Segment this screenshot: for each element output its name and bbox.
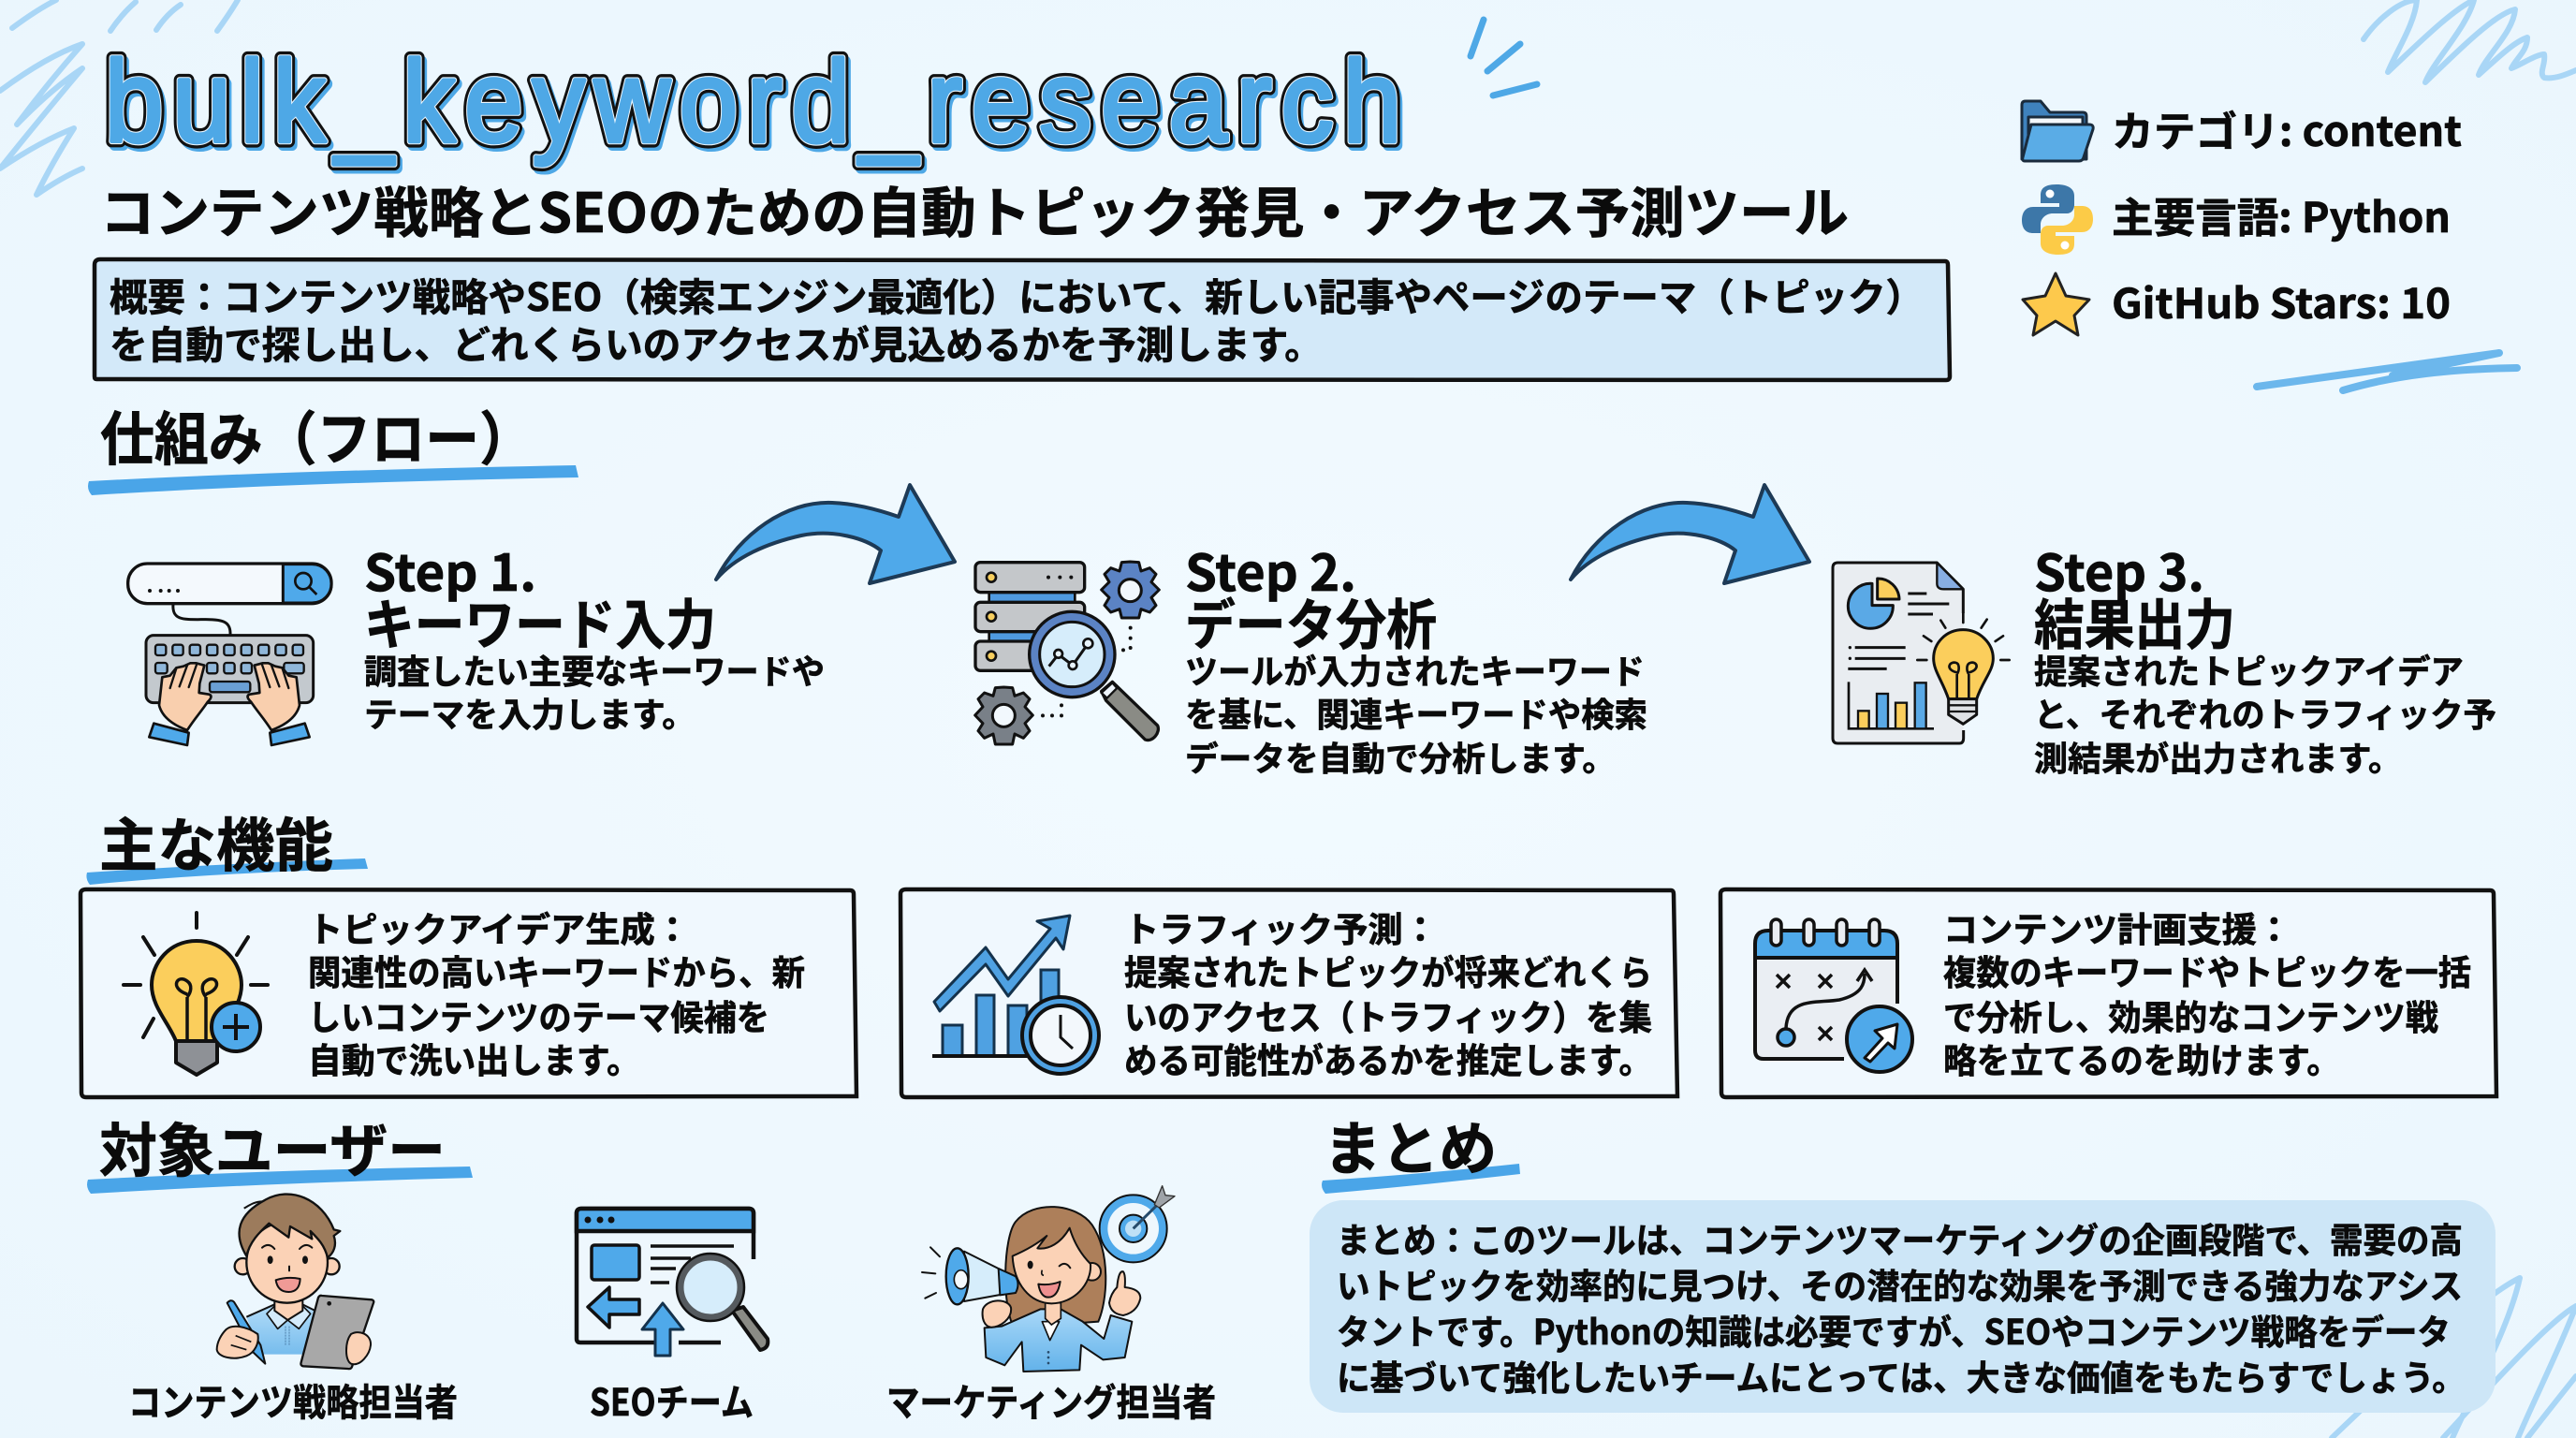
summary text: まとめ：このツールは、コンテンツマーケティングの企画段階で、需要の高 [1337,1212,2463,1263]
feature text: 自動で洗い出します。 [308,1033,640,1083]
user label: コンテンツ戦略担当者 [128,1372,458,1427]
step 1 [128,532,825,745]
feature text: 略を立てるのを助けます。 [1943,1033,2340,1083]
step 1 description: 調査したい主要なキーワードや [364,645,825,694]
step 2 description: データを自動で分析します。 [1185,732,1616,781]
panel: feature topic ideas [80,889,856,1097]
feature text: トラフィック予測： [1124,902,1438,952]
step 2: データ分析 [1185,581,1437,660]
heading: summary: まとめ [1324,1102,1497,1186]
feature text: コンテンツ計画支援： [1943,902,2291,952]
sparkle accent marks [1471,20,1537,95]
meta info list [2022,98,2462,335]
icon: chart and clock [932,916,1099,1074]
summary text: いトピックを効率的に見つけ、その潜在的な効果を予測できる強力なアシス [1337,1258,2463,1309]
decorative scribble top left [0,0,238,195]
icon: python [2022,184,2093,255]
panel: feature content planning [1720,889,2496,1097]
stars label: GitHub Stars: 10 [2112,271,2451,330]
step 2 [975,532,1647,781]
summary text [1337,1212,2466,1401]
panel: summary [1310,1200,2496,1413]
step 1: キーワード入力 [364,581,716,660]
title: bulk_keyword_research [105,37,1401,166]
step 3: 結果出力 [2034,581,2235,660]
user: content strategist [128,1195,458,1427]
step 2 description [1185,645,1647,781]
step 1 description [364,645,825,737]
icon: star [2023,273,2089,335]
panel: overview [95,259,1950,380]
step 3 description: 測結果が出力されます。 [2034,732,2402,781]
user: marketing manager [886,1186,1216,1427]
summary text: タントです。Pythonの知識は必要ですが、SEOやコンテンツ戦略をデータ [1337,1304,2451,1355]
icon: report and light bulb [1833,563,2010,743]
brush accent under meta [2257,353,2517,390]
feature text: で分析し、効果的なコンテンツ戦 [1943,990,2438,1040]
step 3 heading: Step 3. [2034,532,2204,606]
feature text: しいコンテンツのテーマ候補を [308,990,769,1040]
summary text: に基づいて強化したいチームにとっては、大きな価値をもたらすでしょう。 [1337,1350,2466,1401]
subtitle: コンテンツ戦略とSEOのための自動トピック発見・アクセス予測ツール [100,169,1849,248]
icon: man with tablet [217,1195,373,1369]
category label: カテゴリ: content [2112,98,2462,158]
feature text: 関連性の高いキーワードから、新 [308,945,805,995]
step 3 [1833,532,2496,781]
panel: feature traffic forecast [900,889,1677,1097]
icon: search bar and keyboard [128,564,331,745]
feature text: 複数のキーワードやトピックを一括 [1943,945,2471,995]
step 3 description: と、それぞれのトラフィック予 [2034,688,2496,737]
heading: target users: 対象ユーザー [99,1104,446,1188]
title: bulk_keyword_research [105,37,1401,166]
icon: calendar plan [1755,919,1912,1072]
feature text: トピックアイデア生成： [308,902,690,952]
feature text [1124,902,1652,1083]
feature text: 提案されたトピックが将来どれくら [1124,945,1652,995]
language label: 主要言語: Python [2112,184,2451,244]
icon: bulb with plus [124,913,268,1075]
overview text: 概要：コンテンツ戦略やSEO（検索エンジン最適化）において、新しい記事やページのテーマ（トピック） [110,266,1924,322]
step 1 heading: Step 1. [364,532,536,606]
gear grey [975,687,1032,744]
step 2 heading: Step 2. [1185,532,1356,606]
arrow: step 1 to step 2 [716,485,955,583]
title: bulk_keyword_research [108,40,1404,169]
title: bulk_keyword_research [105,37,1401,166]
step 3 description: 提案されたトピックアイデア [2034,645,2464,694]
step 3 description [2034,645,2496,781]
icon: woman with megaphone and target [922,1186,1175,1372]
feature text [308,902,805,1083]
decorative scribble top right [2364,0,2576,82]
overview text: を自動で探し出し、どれくらいのアクセスが見込めるかを予測します。 [110,314,1323,370]
step 2 description: ツールが入力されたキーワード [1185,645,1645,694]
icon: server and magnifier [975,562,1159,744]
heading: features: 主な機能 [99,799,333,883]
step 1 description: テーマを入力します。 [364,688,695,737]
feature text [1943,902,2471,1083]
user: SEO team [577,1209,768,1427]
arrow: step 2 to step 3 [1571,485,1809,583]
overview text [110,266,1924,370]
feature text: める可能性があるかを推定します。 [1124,1033,1652,1083]
feature text: いのアクセス（トラフィック）を集 [1124,990,1652,1040]
decorative scribble bottom right [2332,1278,2576,1438]
user label: マーケティング担当者 [886,1372,1216,1427]
icon: browser with magnifier [577,1209,768,1356]
heading: flow: 仕組み（フロー） [100,392,534,477]
user label: SEOチーム [590,1372,754,1427]
step 2 description: を基に、関連キーワードや検索 [1185,688,1647,737]
icon: folder [2022,101,2093,161]
gear blue [1102,562,1159,618]
